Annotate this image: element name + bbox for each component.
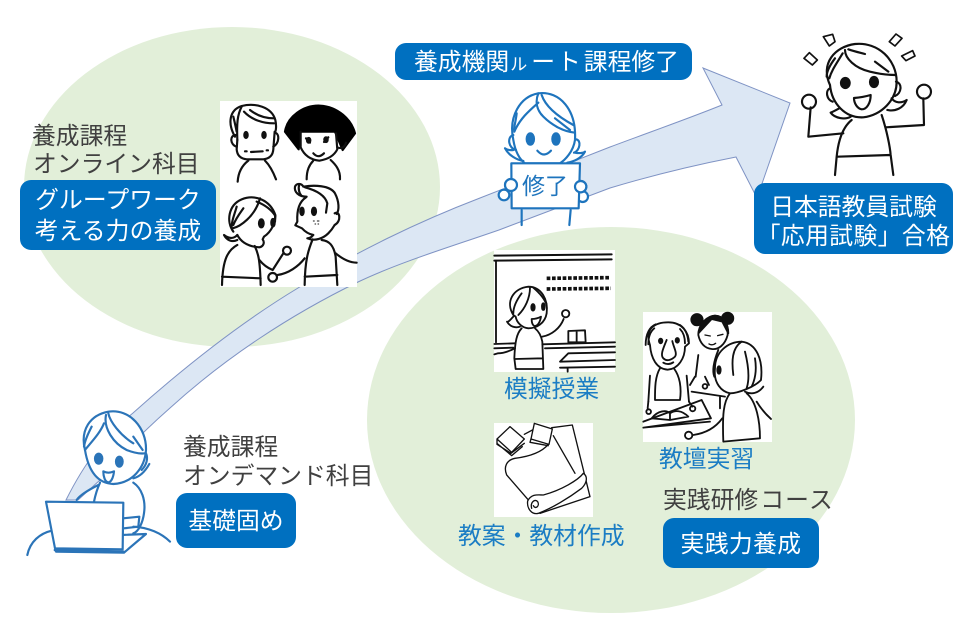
callout: group work: 考える力の養成	[35, 218, 201, 245]
callout: course completion: 養成機関ルート課程修了	[414, 49, 679, 76]
callout: group work	[20, 180, 216, 250]
callout: exam pass	[754, 183, 953, 254]
image: group work illustration	[220, 101, 357, 287]
heading: on-demand subjects: 養成課程	[183, 434, 278, 461]
callout: group work: グループワーク	[35, 187, 201, 214]
caption: teaching practice: 教壇実習	[659, 446, 754, 473]
text: on-demand subjects name: オンデマンド科目	[183, 463, 373, 490]
callout: foundation	[176, 493, 296, 548]
panel: practical training ellipse	[367, 227, 855, 613]
heading: online subjects: 養成課程	[32, 123, 127, 150]
image: mock lesson illustration	[494, 250, 615, 372]
callout: exam pass: 「応用試験」合格	[757, 222, 950, 250]
caption: mock lesson: 模擬授業	[504, 376, 599, 403]
heading: practical training course: 実践研修コース	[663, 487, 834, 514]
callout: foundation: 基礎固め	[188, 508, 284, 535]
callout: exam pass: 日本語教員試験	[770, 194, 937, 220]
caption: lesson plans and materials: 教案・教材作成	[458, 523, 625, 550]
icon: graduate holding sign	[499, 93, 588, 225]
icon: student at laptop	[27, 411, 170, 555]
image: teaching plan scrolls illustration	[494, 423, 593, 517]
icon: celebrating person	[802, 34, 931, 175]
callout: course completion	[395, 43, 692, 80]
sign text: 修了	[522, 173, 568, 199]
text: online subjects name: オンライン科目	[33, 151, 200, 178]
callout: practical skill	[663, 518, 819, 568]
arrow: growth path	[66, 68, 790, 500]
image: teaching practice illustration	[643, 312, 772, 442]
callout: practical skill: 実践力養成	[680, 531, 801, 558]
panel: online courses ellipse	[24, 27, 440, 347]
